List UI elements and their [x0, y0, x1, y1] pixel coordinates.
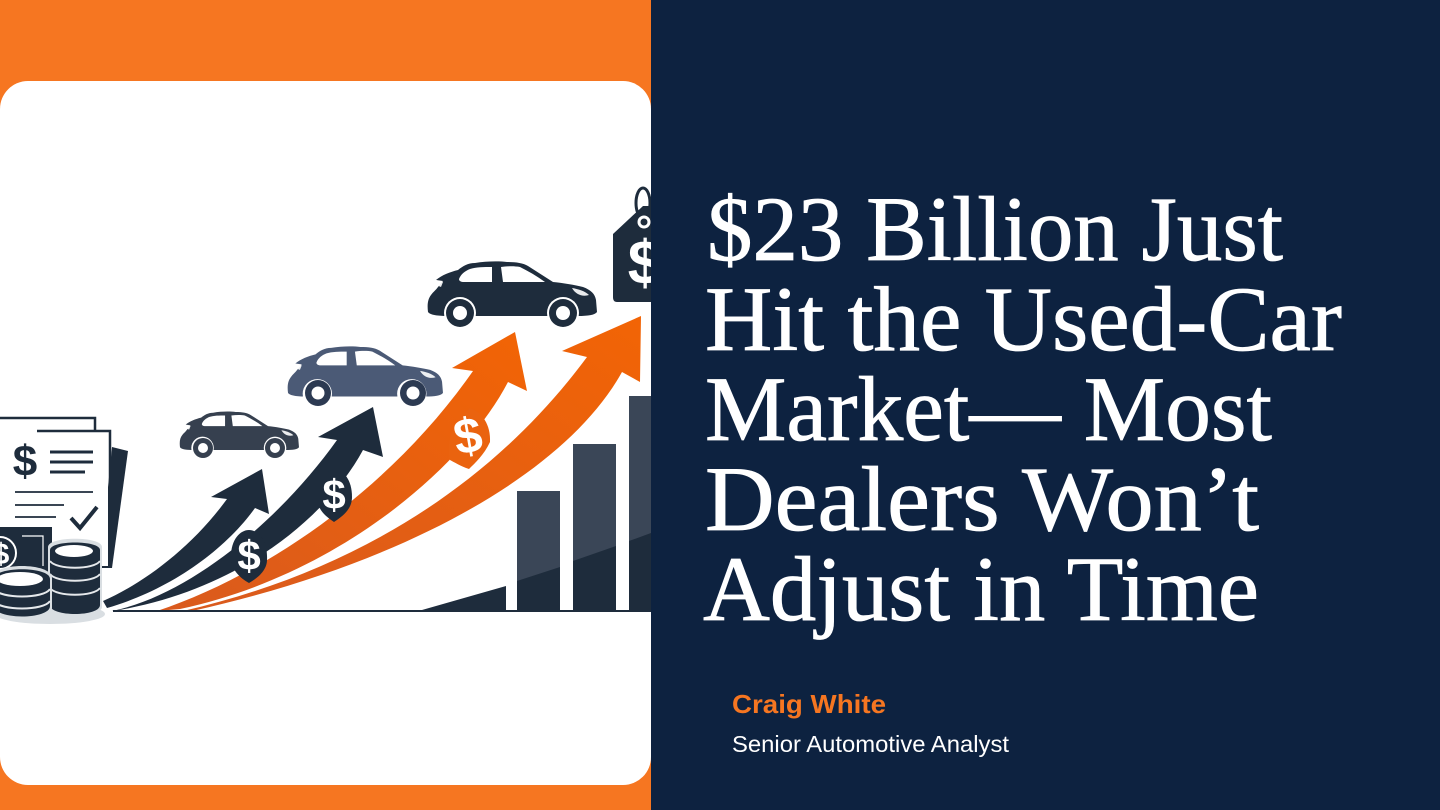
badge: dollar on dark arrow high: $ [322, 471, 346, 518]
author name: Craig White [732, 689, 886, 719]
badge: dollar on dark arrow low: $ [237, 532, 261, 579]
icon: price tag [613, 186, 651, 302]
title [703, 178, 1342, 640]
orange background panel [0, 0, 651, 810]
author role: Senior Automotive Analyst [732, 731, 1010, 757]
arrow: dark medium [112, 407, 383, 611]
wheels: small car [193, 438, 285, 458]
navy title panel [651, 0, 1440, 810]
arrow: orange large [157, 332, 527, 611]
dollar sign on document: $ [13, 437, 37, 486]
badge: dollar on dark arrow high [320, 476, 352, 522]
badge: dollar on dark arrow low [231, 530, 267, 583]
wheels: medium car [305, 380, 426, 406]
icon: price tag: $ [628, 229, 662, 298]
icon: medium car [288, 346, 443, 396]
arrow: dark small [103, 469, 269, 608]
white image card [0, 81, 651, 785]
wheels: large car [446, 299, 577, 327]
title: Market— Most [705, 358, 1272, 460]
title: Hit the Used-Car [705, 268, 1342, 370]
illustration: rising prices [0, 188, 662, 624]
icon: cash note [0, 527, 52, 573]
bar chart: rising bars [113, 396, 659, 612]
title: Dealers Won’t [705, 448, 1259, 550]
title: $23 Billion Just [707, 178, 1283, 280]
icon: coin stacks [0, 539, 105, 624]
badge: dollar on orange arrow: $ [449, 406, 487, 466]
arrow: orange largest [183, 316, 641, 611]
icon: large car [428, 261, 597, 316]
icon: invoice documents [0, 418, 128, 568]
title: Adjust in Time [703, 538, 1259, 640]
icon: small car [180, 412, 299, 450]
